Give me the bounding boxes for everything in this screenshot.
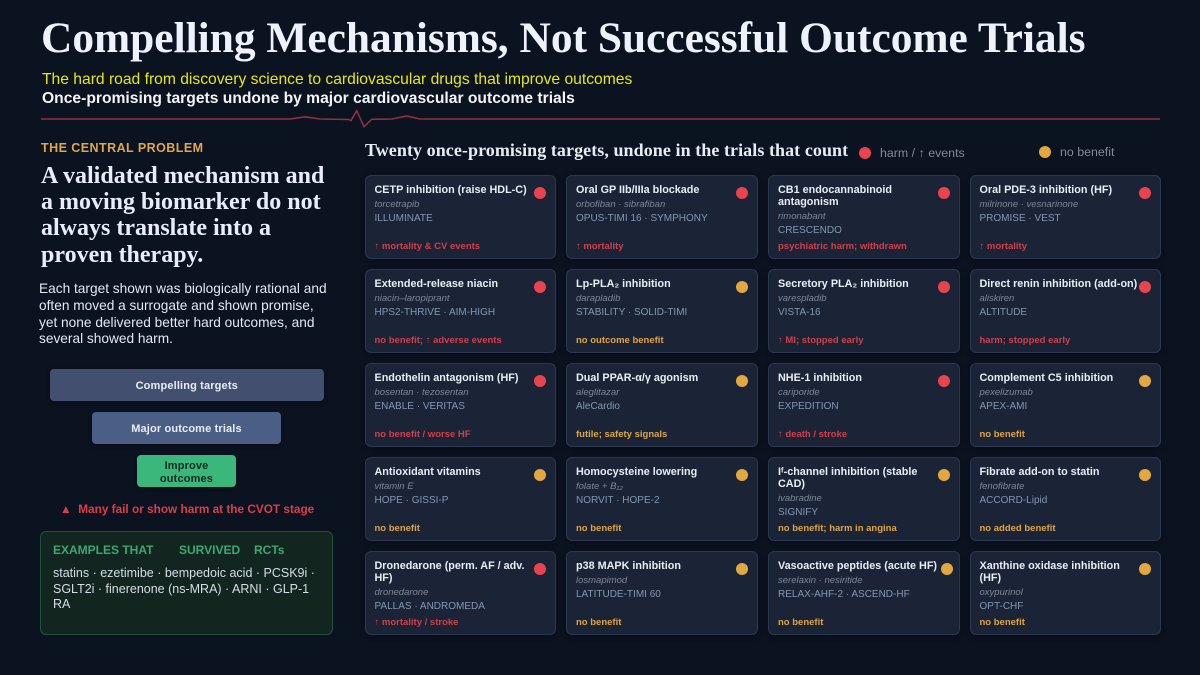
card: p38 MAPK inhibition: LATITUDE-TIMI 60 <box>576 589 661 600</box>
card: Dual PPAR agonism: aleglitazar <box>576 387 619 398</box>
explanatory paragraph: yet none delivered better hard outcomes, and <box>39 315 314 330</box>
card: Fibrate add-on to statin: Fibrate add-on to statin <box>980 466 1099 478</box>
card: Oral GP IIb/IIIa blockade: Oral GP IIb/IIIa blockade <box>576 184 699 196</box>
card: Secretory PLA2 inhibition: Secretory PLA₂ inhibition <box>778 278 909 290</box>
panel: central problem <box>39 140 327 346</box>
explanatory paragraph: Each target shown was biologically rational and <box>39 281 327 296</box>
card: Complement C5 inhibition: APEX-AMI <box>980 401 1027 412</box>
card: Dronedarone: ↑ mortality / stroke <box>374 617 458 628</box>
card: Dronedarone: Dronedarone (perm. AF / adv. <box>374 560 524 572</box>
card: Fibrate add-on to statin: fenofibrate <box>980 481 1024 492</box>
card: Direct renin inhibition <box>970 269 1161 353</box>
card: Secretory PLA2 inhibition: varespladib <box>778 293 827 304</box>
card: CB1 endocannabinoid antagonism: psychiatric harm; withdrawn <box>778 241 907 252</box>
central statement: a moving biomarker do not <box>41 189 321 215</box>
card: NHE-1 inhibition: EXPEDITION <box>778 401 839 412</box>
subtitle: white: Once-promising targets undone by major cardiovascular outcome trials <box>42 90 575 107</box>
funnel: major outcome trials: Major outcome trials <box>131 423 242 435</box>
panel heading <box>53 543 284 557</box>
card: Homocysteine lowering: folate + B₁₂ <box>576 481 623 492</box>
card: Dual PPAR agonism <box>566 363 758 447</box>
explanatory paragraph: often moved a surrogate and shown promise, <box>39 298 314 313</box>
panel heading: EXAMPLES THAT <box>53 543 153 557</box>
panel: examples that survived RCTs <box>40 531 333 635</box>
card: Oral GP IIb/IIIa blockade <box>566 175 758 259</box>
ECG divider line <box>41 109 1160 128</box>
card: Lp-PLA2 inhibition: Lp-PLA₂ inhibition <box>576 278 671 290</box>
card: If-channel inhibition: no benefit; harm in angina <box>778 523 897 534</box>
central statement: always translate into a <box>41 215 271 241</box>
card: Homocysteine lowering <box>566 457 758 541</box>
funnel: improve outcomes <box>137 455 236 487</box>
card: Dronedarone: dronedarone <box>374 586 428 598</box>
card: Oral GP IIb/IIIa blockade: orbofiban · sibrafiban <box>576 199 665 210</box>
card: Vasoactive peptides: no benefit <box>778 617 823 628</box>
funnel diagram <box>50 369 324 516</box>
card: CETP inhibition: ILLUMINATE <box>374 213 433 224</box>
card: Extended-release niacin: no benefit; ↑ adverse events <box>374 335 502 346</box>
card: Extended-release niacin: HPS2-THRIVE · AIM-HIGH <box>374 307 495 318</box>
grid heading: Twenty once-promising targets, undone in the trials that count <box>365 140 848 160</box>
card: Oral PDE-3 inhibition <box>970 175 1161 259</box>
card: Xanthine oxidase inhibition: (HF) <box>980 572 1001 584</box>
card: Oral GP IIb/IIIa blockade: OPUS-TIMI 16 · SYMPHONY <box>576 213 708 224</box>
card: Complement C5 inhibition: Complement C5 inhibition <box>980 372 1113 384</box>
card: Direct renin inhibition: harm; stopped early <box>980 335 1070 346</box>
card: Homocysteine lowering: Homocysteine lowering <box>576 466 697 478</box>
panel heading: RCTs <box>254 543 284 557</box>
card: Secretory PLA2 inhibition <box>768 269 960 353</box>
warning: ▲ Many fail or show harm at the CVOT stage <box>60 502 314 516</box>
card: Xanthine oxidase inhibition <box>970 551 1161 635</box>
card: Endothelin antagonism: no benefit / worse HF <box>374 429 471 440</box>
card: Xanthine oxidase inhibition: no benefit <box>980 617 1025 628</box>
card: CETP inhibition: ↑ mortality & CV events <box>374 241 480 252</box>
card: Direct renin inhibition: ALTITUDE <box>980 307 1027 318</box>
card: CETP inhibition: torcetrapib <box>374 199 419 210</box>
card: Fibrate add-on to statin: no added benefit <box>980 523 1056 534</box>
card: Xanthine oxidase inhibition: Xanthine oxidase inhibition <box>980 560 1120 572</box>
card: NHE-1 inhibition: cariporide <box>778 387 820 398</box>
card: Oral PDE-3 inhibition: Oral PDE-3 inhibition (HF) <box>980 184 1112 196</box>
card: Dronedarone: PALLAS · ANDROMEDA <box>374 601 485 612</box>
card: p38 MAPK inhibition: no benefit <box>576 617 621 628</box>
central statement <box>41 162 324 268</box>
card: If-channel inhibition: Iᶠ-channel inhibition (stable <box>778 466 917 478</box>
card: Endothelin antagonism <box>364 363 556 447</box>
legend: no benefit: no benefit <box>1060 145 1114 159</box>
funnel: improve outcomes: outcomes <box>160 473 213 485</box>
examples list: statins · ezetimibe · bempedoic acid · PCSK9i · <box>53 566 315 580</box>
examples list: RA <box>53 597 70 611</box>
examples list: SGLT2i · finerenone (ns-MRA) · ARNI · GLP-1 <box>53 582 309 596</box>
card: Oral PDE-3 inhibition: ↑ mortality <box>980 241 1027 252</box>
card: p38 MAPK inhibition: losmapimod <box>576 575 627 586</box>
funnel: compelling targets <box>50 369 324 401</box>
card: Lp-PLA2 inhibition: STABILITY · SOLID-TIMI <box>576 307 687 318</box>
subtitle: yellow: The hard road from discovery science to cardiovascular drugs that improve outcomes <box>42 71 632 88</box>
legend <box>859 145 1114 160</box>
card: If-channel inhibition: SIGNIFY <box>778 507 818 518</box>
card: Fibrate add-on to statin: ACCORD-Lipid <box>980 495 1047 506</box>
card: Complement C5 inhibition <box>970 363 1161 447</box>
card: CB1 endocannabinoid antagonism: antagonism <box>778 196 839 208</box>
card: p38 MAPK inhibition: p38 MAPK inhibition <box>576 560 681 572</box>
card: Endothelin antagonism: ENABLE · VERITAS <box>374 401 465 412</box>
card: Antioxidant vitamins: no benefit <box>374 523 420 534</box>
card: Complement C5 inhibition: no benefit <box>980 429 1025 440</box>
card: Direct renin inhibition: Direct renin inhibition (add-on) <box>980 278 1137 290</box>
card: Dual PPAR agonism: AleCardio <box>576 401 620 412</box>
card: If-channel inhibition <box>768 457 960 541</box>
card: NHE-1 inhibition: NHE-1 inhibition <box>778 372 862 384</box>
card: If-channel inhibition: ivabradine <box>778 492 822 504</box>
card: Lp-PLA2 inhibition: no outcome benefit <box>576 335 664 346</box>
card: Direct renin inhibition: aliskiren <box>980 293 1014 304</box>
card: Antioxidant vitamins: vitamin E <box>374 481 414 492</box>
card: NHE-1 inhibition: ↑ death / stroke <box>778 429 847 440</box>
explanatory paragraph <box>39 281 327 346</box>
card: Oral GP IIb/IIIa blockade: ↑ mortality <box>576 241 624 252</box>
funnel: major outcome trials <box>92 412 281 444</box>
card: CB1 endocannabinoid antagonism: CRESCENDO <box>778 225 842 236</box>
card: Endothelin antagonism: Endothelin antagonism (HF) <box>374 372 518 384</box>
card: If-channel inhibition: CAD) <box>778 478 805 490</box>
card: Dual PPAR agonism: futile; safety signals <box>576 429 667 440</box>
card: Lp-PLA2 inhibition <box>566 269 758 353</box>
card: Endothelin antagonism: bosentan · tezosentan <box>374 387 469 398</box>
card: Oral PDE-3 inhibition: PROMISE · VEST <box>980 213 1061 224</box>
card: Vasoactive peptides: RELAX-AHF-2 · ASCEND-HF <box>778 589 910 600</box>
funnel: improve outcomes: Improve <box>165 460 208 472</box>
card: Dronedarone: HF) <box>374 572 392 584</box>
title: Compelling Mechanisms, Not Successful Outcome Trials <box>41 14 1086 62</box>
card: Extended-release niacin <box>364 269 556 353</box>
card: CB1 endocannabinoid antagonism <box>768 175 960 259</box>
panel heading: SURVIVED <box>179 543 240 557</box>
funnel: compelling targets: Compelling targets <box>136 380 238 392</box>
card: Secretory PLA2 inhibition: VISTA-16 <box>778 307 821 318</box>
card: Lp-PLA2 inhibition: darapladib <box>576 293 620 304</box>
card: Secretory PLA2 inhibition: ↑ MI; stopped early <box>778 335 864 346</box>
card: Antioxidant vitamins <box>364 457 556 541</box>
card: Vasoactive peptides: serelaxin · nesiritide <box>778 575 862 586</box>
card: Complement C5 inhibition: pexelizumab <box>980 387 1033 398</box>
card: Dual PPAR agonism: Dual PPAR-α/γ agonism <box>576 372 698 384</box>
legend: harm: harm / ↑ events <box>880 146 965 160</box>
card: Oral PDE-3 inhibition: milrinone · vesnarinone <box>980 199 1078 210</box>
card: Homocysteine lowering: no benefit <box>576 523 621 534</box>
card: Vasoactive peptides: Vasoactive peptides (acute HF) <box>778 560 937 572</box>
central statement: proven therapy. <box>41 242 203 268</box>
card: Homocysteine lowering: NORVIT · HOPE-2 <box>576 495 660 506</box>
card: Vasoactive peptides <box>768 551 960 635</box>
card: Xanthine oxidase inhibition: oxypurinol <box>980 586 1023 598</box>
card: CETP inhibition <box>364 175 556 259</box>
card: Antioxidant vitamins: HOPE · GISSI-P <box>374 495 448 506</box>
central statement: A validated mechanism and <box>41 162 324 188</box>
section label: THE CENTRAL PROBLEM <box>41 140 204 154</box>
card: Dronedarone <box>364 551 556 635</box>
explanatory paragraph: several showed harm. <box>39 331 173 346</box>
card: NHE-1 inhibition <box>768 363 960 447</box>
card: p38 MAPK inhibition <box>566 551 758 635</box>
examples list <box>53 566 315 611</box>
card: Extended-release niacin: Extended-release niacin <box>374 278 498 290</box>
card: CETP inhibition: CETP inhibition (raise HDL-C) <box>374 184 527 196</box>
card: Xanthine oxidase inhibition: OPT-CHF <box>980 601 1023 612</box>
card: Fibrate add-on to statin <box>970 457 1161 541</box>
card: Extended-release niacin: niacin–laropiprant <box>374 293 450 304</box>
card: CB1 endocannabinoid antagonism: CB1 endocannabinoid <box>778 184 892 196</box>
card: CB1 endocannabinoid antagonism: rimonabant <box>778 210 826 222</box>
card: Antioxidant vitamins: Antioxidant vitamins <box>374 466 481 478</box>
